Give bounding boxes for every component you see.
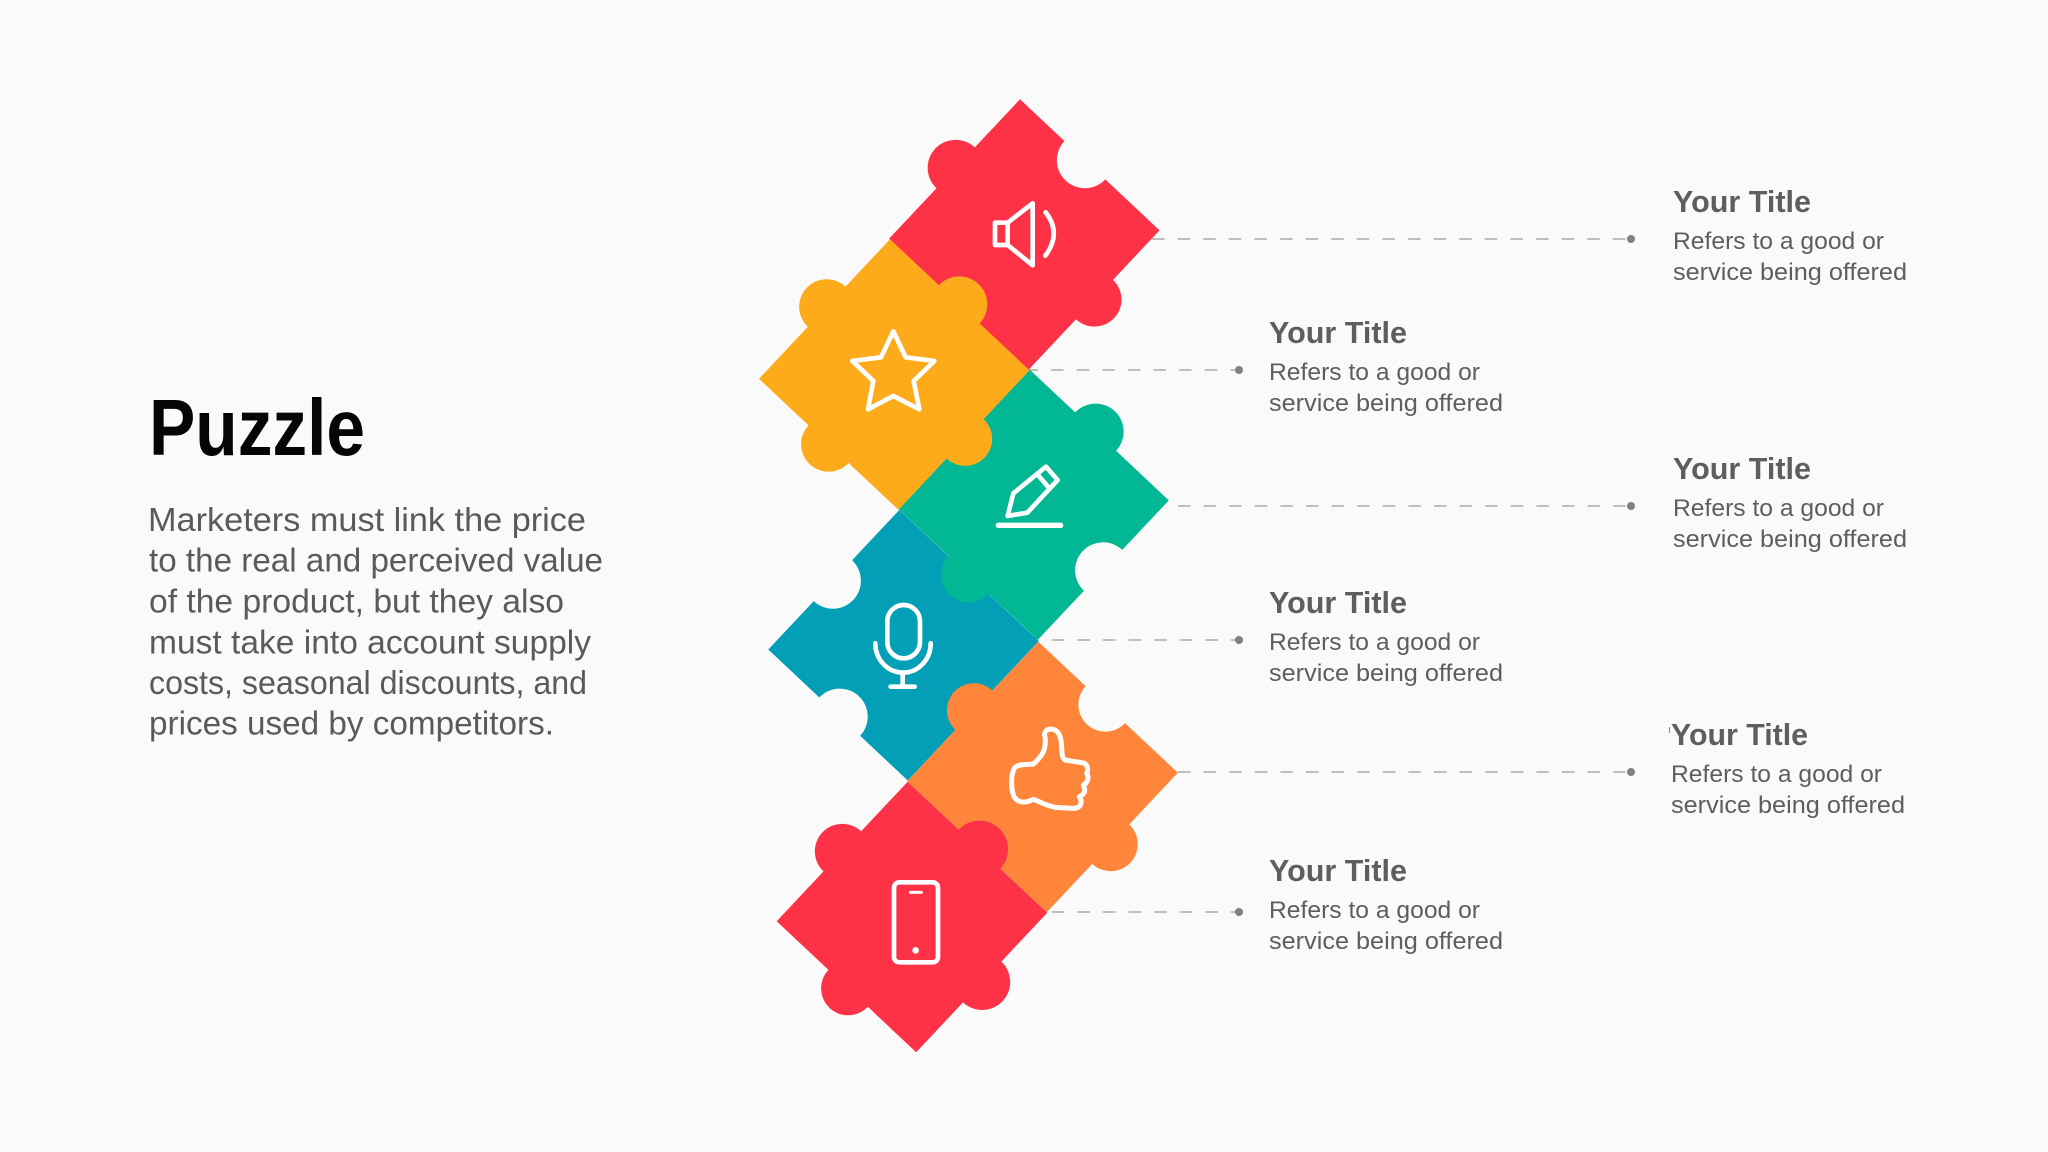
callout 6: service being offered xyxy=(1269,928,1503,955)
callout 2: Your Title xyxy=(1269,315,1407,350)
icon: star xyxy=(852,331,934,409)
callout 5 xyxy=(1669,717,1905,819)
intro text block: to the real and perceived value xyxy=(149,543,603,580)
icon: speaker xyxy=(995,203,1054,265)
puzzle piece: red phone xyxy=(738,742,1087,1091)
callout 2: Refers to a good or xyxy=(1269,359,1480,386)
leader line 2 xyxy=(1026,366,1243,374)
intro text block: of the product, but they also xyxy=(149,583,564,620)
intro text block xyxy=(148,502,603,742)
callout 1: service being offered xyxy=(1673,259,1907,286)
callout 3: Refers to a good or xyxy=(1673,495,1884,522)
callout 4: Refers to a good or xyxy=(1269,629,1480,656)
puzzle piece: yellow star xyxy=(720,200,1068,548)
leader line 3 xyxy=(1178,502,1635,510)
intro text block: costs, seasonal discounts, and xyxy=(149,665,587,702)
icon: microphone xyxy=(875,605,931,687)
callout 1 xyxy=(1673,184,1907,286)
intro text block: prices used by competitors. xyxy=(149,705,554,742)
leader line 5 xyxy=(1178,768,1635,776)
callout 4: Your Title xyxy=(1269,585,1407,620)
title: Puzzle xyxy=(149,383,365,472)
leader line 4 xyxy=(1052,636,1243,644)
leader line 1 xyxy=(1152,235,1635,243)
callout 3 xyxy=(1673,451,1907,553)
callout 1: Your Title xyxy=(1673,184,1811,219)
callout 1: Refers to a good or xyxy=(1673,228,1884,255)
intro text block: Marketers must link the price xyxy=(148,502,586,539)
puzzle piece: red speaker xyxy=(869,80,1179,388)
intro text block: must take into account supply xyxy=(149,624,591,661)
leader line 6 xyxy=(1052,908,1243,916)
callout 3: service being offered xyxy=(1673,526,1907,553)
icon: phone xyxy=(894,882,938,962)
puzzle piece: orange thumbs up xyxy=(888,623,1198,931)
callout 4: service being offered xyxy=(1269,660,1503,687)
puzzle piece: green pencil xyxy=(879,349,1188,660)
callout 6: Your Title xyxy=(1269,853,1407,888)
icon: thumbs up xyxy=(1012,729,1088,808)
callout 2: service being offered xyxy=(1269,390,1503,417)
callout 4 xyxy=(1269,585,1503,687)
icon: pencil xyxy=(998,467,1061,525)
callout 6: Refers to a good or xyxy=(1269,897,1480,924)
puzzle piece: teal microphone xyxy=(768,510,1039,781)
callout 5: Refers to a good or xyxy=(1671,761,1882,788)
callout 6 xyxy=(1269,853,1503,955)
callout 3: Your Title xyxy=(1673,451,1811,486)
callout 5: Your Title xyxy=(1671,717,1808,752)
callout 2 xyxy=(1269,315,1503,417)
callout 5: service being offered xyxy=(1671,792,1905,819)
